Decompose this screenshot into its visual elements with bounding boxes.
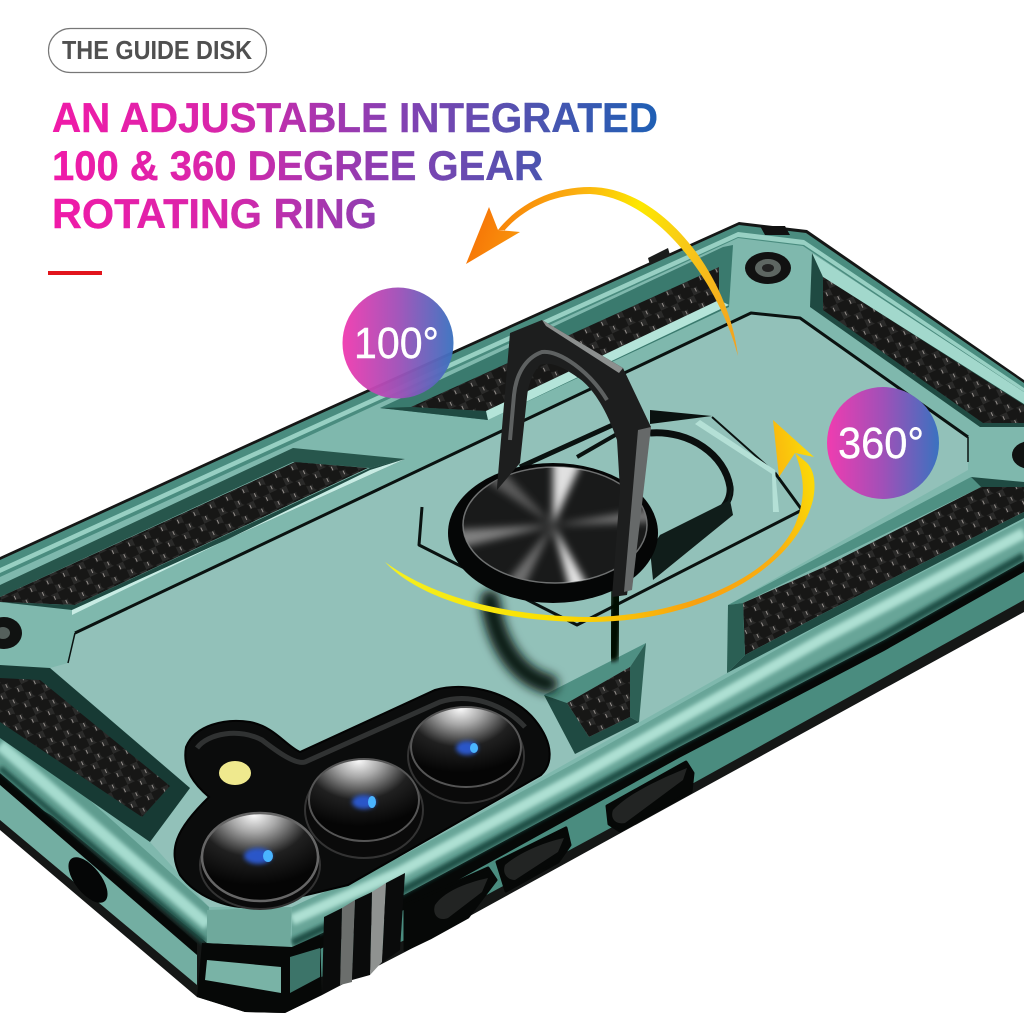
metal disc base	[448, 455, 658, 603]
red accent rule	[48, 271, 102, 275]
side button: middle	[497, 828, 570, 891]
arch top face	[542, 320, 623, 373]
top edge highlight stripe	[0, 232, 1024, 573]
ring shadow on plate	[490, 590, 617, 684]
corner screw: left	[0, 617, 22, 649]
corner stripes	[322, 873, 405, 995]
corner screw: top	[745, 252, 791, 284]
title: ROTATING RING	[52, 190, 377, 237]
grip panel: small centre	[544, 643, 646, 754]
arrow: bottom rotation	[385, 420, 815, 622]
flash	[219, 761, 251, 785]
octagon recess outline	[419, 410, 802, 625]
recess light bevel	[695, 420, 779, 512]
edge clips	[648, 248, 672, 272]
plate outline	[68, 313, 968, 663]
camera module	[175, 687, 550, 909]
outer edge band	[0, 225, 1024, 990]
arch right leg highlight	[624, 427, 651, 592]
grip panel: top	[380, 245, 733, 420]
badge: 100 degrees: 100°	[354, 319, 439, 368]
right lower rail	[292, 520, 1024, 947]
title: 100 & 360 DEGREE GEAR	[52, 142, 543, 189]
title: AN ADJUSTABLE INTEGRATED	[52, 94, 658, 141]
arch inner highlight	[510, 352, 607, 440]
lens: right	[408, 707, 524, 803]
grip panel: lower left	[0, 665, 190, 842]
grip panel: top right	[810, 253, 1024, 427]
badge: 360 degrees: 360°	[838, 419, 924, 468]
lens: middle	[305, 759, 423, 858]
ring recess slot	[650, 433, 733, 580]
pill label: the guide disk: THE GUIDE DISK	[62, 35, 252, 65]
grip panel: left	[0, 448, 405, 615]
raised back plate	[50, 313, 968, 907]
ring arch handle	[497, 320, 651, 597]
arrow: top rotation	[466, 187, 738, 356]
lens: left	[200, 813, 320, 909]
charging port	[61, 851, 115, 909]
title	[52, 94, 658, 237]
bottom corner detail	[197, 935, 322, 1013]
case dark silhouette	[0, 222, 1024, 1013]
pill label: the guide disk	[48, 28, 266, 72]
badge: 100 degrees	[342, 288, 454, 398]
side button: right	[607, 762, 693, 831]
lower side strip	[0, 561, 1024, 985]
badge: 360 degrees	[827, 387, 939, 499]
grip panel: lower right	[727, 477, 1024, 673]
corner screw: right	[1012, 441, 1024, 469]
side button: left	[405, 868, 496, 950]
left lower rail	[0, 720, 209, 943]
upper shell face	[0, 238, 1024, 947]
corner facet	[207, 907, 292, 947]
